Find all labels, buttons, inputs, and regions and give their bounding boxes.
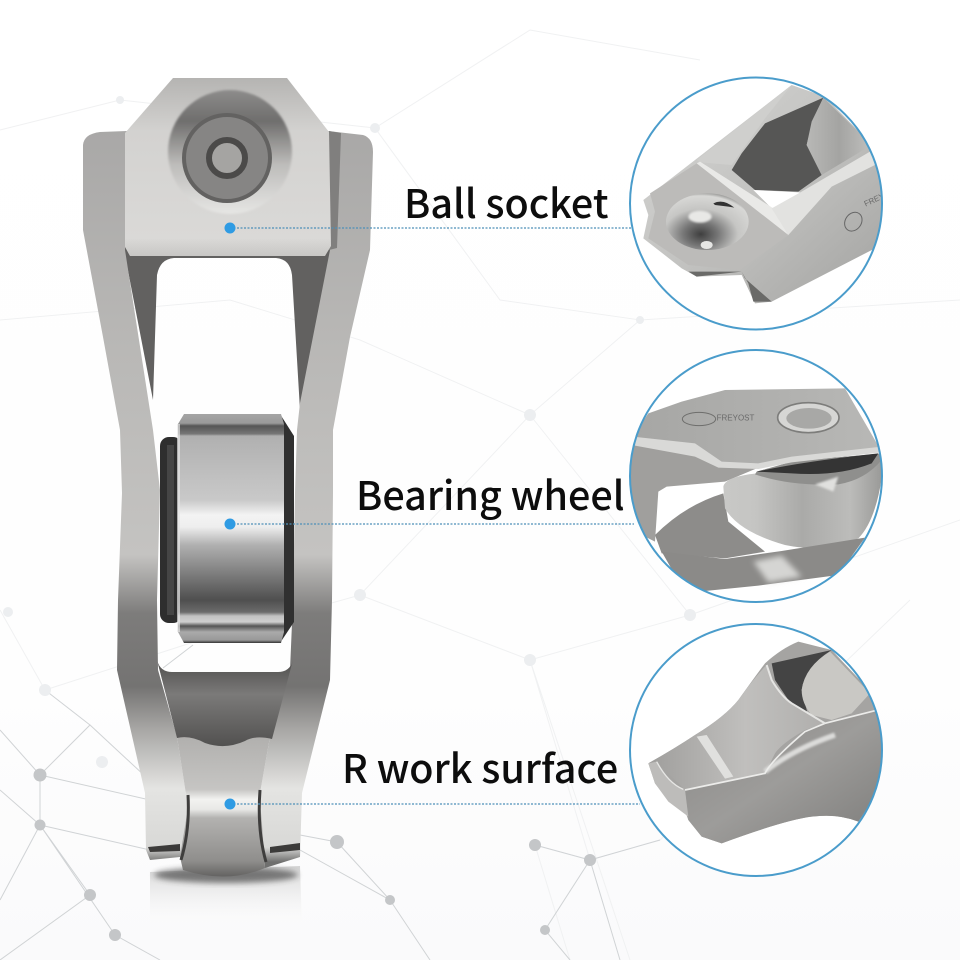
dark gussets under plate: [123, 245, 332, 410]
bearing wheel: [160, 414, 294, 643]
leader line: [230, 803, 640, 805]
callout: R work surface: [224, 624, 885, 876]
label: Ball socket: [404, 173, 608, 230]
marker: [224, 222, 236, 234]
marker: [224, 798, 236, 810]
left arm: [83, 131, 188, 860]
label: R work surface: [342, 738, 618, 795]
callout: ball socket: [224, 78, 901, 330]
detail circle: [625, 350, 882, 602]
label: Bearing wheel: [356, 465, 624, 522]
ball socket recess: [168, 90, 292, 214]
top plate: [125, 78, 331, 256]
product: rocker arm: [83, 78, 373, 930]
detail circle: [630, 624, 885, 876]
reflection under part: [150, 866, 302, 930]
callout: bearing wheel: [224, 350, 882, 602]
right arm inner shadow strip: [329, 131, 341, 250]
right arm: [260, 131, 373, 868]
detail circle: [630, 78, 901, 330]
leader line: [230, 227, 634, 229]
leader line: [230, 523, 634, 525]
lower body and R work surface: [148, 660, 300, 877]
engraved mark: FREYOST: [863, 184, 901, 208]
engraved mark: FREYOST: [717, 413, 754, 422]
marker: [224, 518, 236, 530]
